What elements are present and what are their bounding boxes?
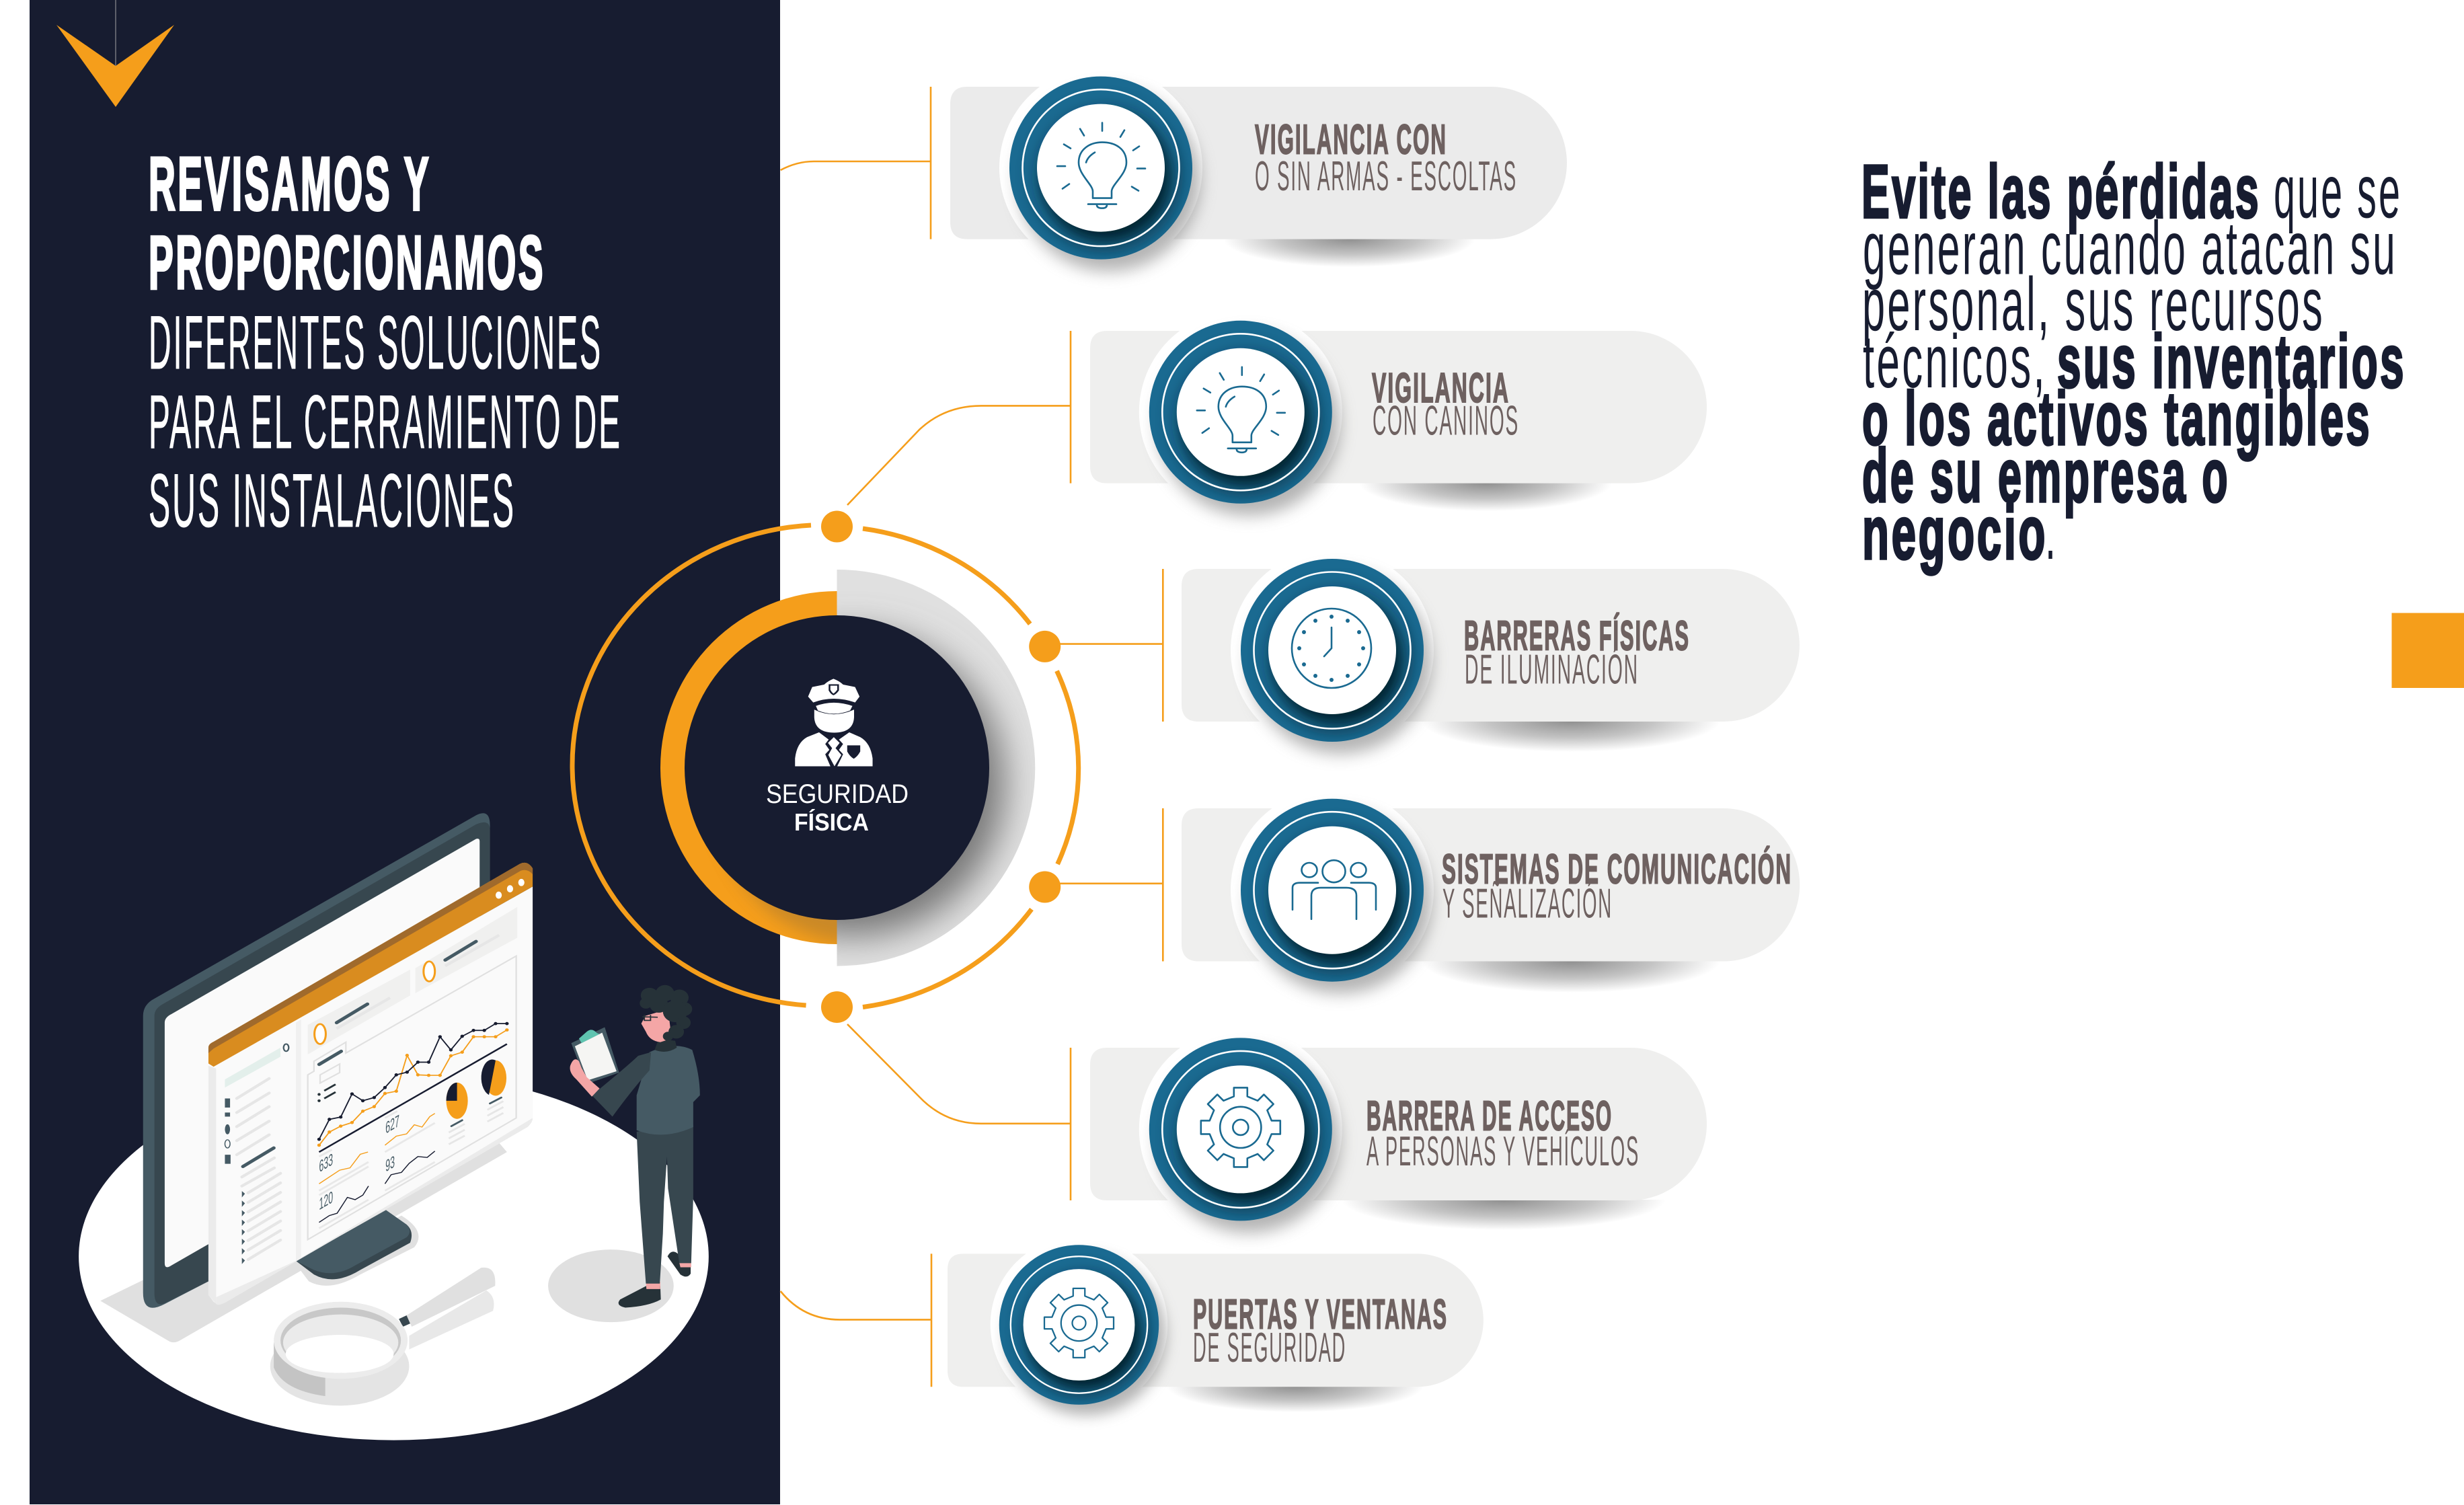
- floor shadows: [100, 1143, 507, 1342]
- item: vigilancia con caninos: [1090, 311, 1707, 516]
- icon: light bulb: [1197, 367, 1285, 453]
- dashboard pie charts: [447, 1060, 506, 1145]
- item: sistemas de comunicación: [1182, 789, 1800, 994]
- person reviewing clipboard: [548, 985, 700, 1322]
- medallion: [1231, 549, 1434, 754]
- item: puertas y ventanas: [948, 1236, 1484, 1415]
- dashboard small charts: 627: [385, 1112, 399, 1138]
- monitor stand: [296, 1210, 412, 1279]
- label: VIGILANCIA: [1372, 365, 1510, 412]
- orange half ring: [660, 591, 837, 944]
- item: vigilancia con o sin armas: [950, 67, 1567, 272]
- icon: people: [1293, 860, 1376, 919]
- connector lines: [781, 87, 1163, 1387]
- medallion: [991, 1236, 1167, 1415]
- text block: right statement: .: [2045, 491, 2056, 575]
- icon: security guard: [795, 679, 873, 766]
- dashboard line chart: [308, 956, 516, 1239]
- dashboard sidebar: [225, 1044, 288, 1264]
- text block: right statement: técnicos,: [1863, 319, 2047, 403]
- text block: right statement: [1861, 149, 2406, 575]
- item: barreras físicas de iluminación: DE ILUMINACIÓN: [1465, 647, 1639, 693]
- dashboard stat cards: [308, 907, 517, 1054]
- decorative orange square: [2391, 613, 2464, 688]
- infographic canvas: PARA EL CERRAMIENTO DE: [149, 380, 622, 464]
- icon: gear: [1044, 1288, 1114, 1358]
- text block: right statement: negocio: [1862, 491, 2048, 575]
- item: sistemas de comunicación: Y SEÑALIZACIÓN: [1442, 881, 1613, 927]
- item: barreras físicas de iluminación: BARRERAS FÍSICAS: [1464, 613, 1690, 659]
- dashboard small charts: [319, 1111, 435, 1228]
- hub shadow on orange: [728, 874, 837, 944]
- item: barrera de acceso: A PERSONAS Y VEHÍCULOS: [1366, 1128, 1640, 1175]
- central hub: FÍSICA: [794, 808, 869, 836]
- item: barrera de acceso: [1090, 1028, 1707, 1233]
- icon: clock: [1292, 609, 1371, 688]
- hub shadow on gray: [837, 610, 1028, 958]
- heading: left column: REVISAMOS Y: [149, 142, 431, 226]
- heading: left column: PROPORCIONAMOS: [149, 221, 545, 305]
- dashboard window: [208, 863, 533, 1305]
- dashboard small charts: 633: [319, 1151, 333, 1177]
- icon: orange chevron: [56, 0, 174, 107]
- item: puertas y ventanas: DE SEGURIDAD: [1193, 1325, 1346, 1371]
- magnifying glass: [270, 1268, 495, 1405]
- central hub: [660, 570, 1035, 966]
- item: puertas y ventanas: PUERTAS Y VENTANAS: [1193, 1291, 1448, 1338]
- monitor: [143, 813, 490, 1308]
- label: SISTEMAS DE COMUNICACIÓN: [1442, 846, 1792, 892]
- medallion: [1231, 789, 1434, 994]
- item: barrera de acceso: BARRERA DE ACCESO: [1366, 1093, 1613, 1140]
- medallion: [999, 67, 1202, 272]
- gray half ring: [837, 570, 1035, 966]
- dark hub circle: [685, 615, 989, 920]
- item: vigilancia con o sin armas: O SIN ARMAS - ESCOLTAS: [1255, 153, 1517, 200]
- dashboard small charts: 120: [319, 1188, 333, 1214]
- medallion: [1139, 1028, 1342, 1233]
- label: VIGILANCIA CON: [1255, 116, 1447, 163]
- heading: left column: [149, 142, 622, 543]
- icon: light bulb: [1057, 123, 1145, 208]
- icon: gear: [1201, 1087, 1280, 1167]
- heading: left column: SUS INSTALACIONES: [149, 459, 516, 543]
- white platform ellipse: [79, 1073, 709, 1440]
- outer segmented ring: [572, 511, 1079, 1023]
- panel: dark left column: [30, 0, 780, 1504]
- infographic canvas: DIFERENTES SOLUCIONES: [149, 301, 603, 385]
- dashboard small charts: 93: [385, 1153, 395, 1176]
- medallion: [1139, 311, 1342, 516]
- hub label: SEGURIDAD: [766, 779, 909, 809]
- illustration: monitor dashboard and analyst: [79, 813, 709, 1440]
- item: barreras físicas de iluminación: [1182, 549, 1800, 754]
- item: vigilancia con caninos: CON CANINOS: [1373, 398, 1519, 445]
